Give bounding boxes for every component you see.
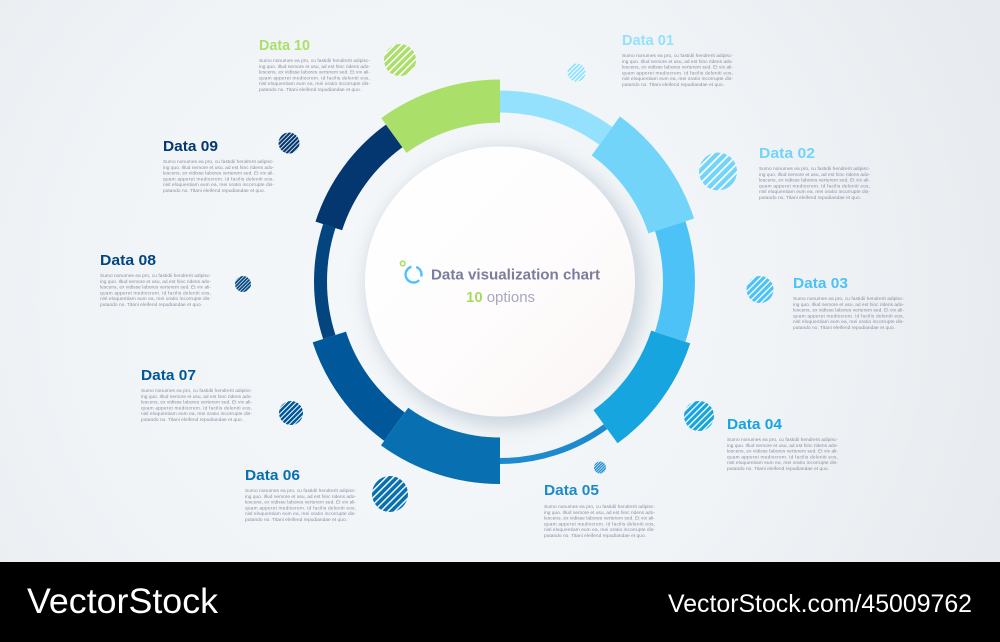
text block: data 06: Data 06: [245, 467, 300, 484]
text block: data 07: Data 07: [141, 367, 196, 384]
center logo icon: [400, 261, 421, 282]
text block: data 05: [544, 482, 655, 539]
text block: data 05: lescens, ex vidisse labores verterem sed. Et vix ali-: [544, 516, 655, 522]
text block: data 08: Data 08: [100, 252, 156, 269]
text block: data 01: nisl eloquentiam eum ea, mei oratio incorrupte dis-: [622, 76, 733, 82]
text block: data 09: Sumo nonumes ea pro, cu fastidii hendrerit adipisc-: [163, 159, 274, 165]
text block: data 08: ing quo. Illud nemore et usu, ad est hinc ridens ado-: [100, 279, 211, 285]
text block: data 07: quam apperet mediocrem. Id facilis deleniti eos,: [141, 405, 252, 411]
text block: data 09: putando no. Titani eleifend repudiandae et quo.: [163, 188, 265, 194]
text block: data 03: quam apperet mediocrem. Id facilis deleniti eos,: [793, 313, 904, 319]
text block: data 04: nisl eloquentiam eum ea, mei oratio incorrupte dis-: [727, 460, 838, 466]
text block: data 02: nisl eloquentiam eum ea, mei oratio incorrupte dis-: [759, 189, 870, 195]
text block: data 10: Data 10: [259, 37, 310, 54]
text block: data 02: Data 02: [759, 145, 815, 162]
text block: data 06: nisl eloquentiam eum ea, mei oratio incorrupte dis-: [245, 511, 356, 517]
segment: data 05: [500, 427, 606, 461]
text block: data 03: Sumo nonumes ea pro, cu fastidii hendrerit adipisc-: [793, 296, 904, 302]
text block: data 08: nisl eloquentiam eum ea, mei oratio incorrupte dis-: [100, 296, 211, 302]
text block: data 07: nisl eloquentiam eum ea, mei oratio incorrupte dis-: [141, 411, 252, 417]
text block: data 10: putando no. Titani eleifend repudiandae et quo.: [259, 87, 361, 93]
text block: data 04: ing quo. Illud nemore et usu, ad est hinc ridens ado-: [727, 443, 838, 449]
text block: data 01: Data 01: [622, 32, 674, 49]
marker: data 07: [279, 401, 303, 425]
text block: data 02: ing quo. Illud nemore et usu, ad est hinc ridens ado-: [759, 172, 870, 178]
text block: data 04: Data 04: [727, 416, 783, 433]
text block: data 06: putando no. Titani eleifend repudiandae et quo.: [245, 517, 347, 523]
text block: data 05: Data 05: [544, 482, 599, 499]
segment: data 08: [321, 226, 329, 337]
segment: data 09: [329, 136, 394, 226]
marker: data 06: [372, 476, 408, 512]
text block: data 07: lescens, ex vidisse labores verterem sed. Et vix ali-: [141, 400, 252, 406]
text block: data 03: Data 03: [793, 275, 848, 292]
footer bar: [0, 562, 1000, 642]
marker: data 01: [568, 64, 586, 82]
text block: data 08: quam apperet mediocrem. Id facilis deleniti eos,: [100, 290, 211, 296]
text block: data 09: ing quo. Illud nemore et usu, ad est hinc ridens ado-: [163, 165, 274, 171]
text block: data 01: quam apperet mediocrem. Id facilis deleniti eos,: [622, 70, 733, 76]
text block: data 01: ing quo. Illud nemore et usu, ad est hinc ridens ado-: [622, 59, 733, 65]
text block: data 02: quam apperet mediocrem. Id facilis deleniti eos,: [759, 183, 870, 189]
text block: data 09: [163, 138, 274, 194]
center subtitle: 10 options: [466, 289, 535, 306]
text block: data 10: nisl eloquentiam eum ea, mei oratio incorrupte dis-: [259, 81, 370, 87]
segment: data 01: [500, 102, 606, 136]
text block: data 04: lescens, ex vidisse labores verterem sed. Et vix ali-: [727, 449, 838, 455]
text block: data 08: [100, 252, 211, 308]
text block: data 01: Sumo nonumes ea pro, cu fastidii hendrerit adipisc-: [622, 53, 733, 59]
text block: data 10: [259, 37, 370, 93]
text block: data 07: putando no. Titani eleifend repudiandae et quo.: [141, 417, 243, 423]
text block: data 09: nisl eloquentiam eum ea, mei oratio incorrupte dis-: [163, 182, 274, 188]
text block: data 04: putando no. Titani eleifend repudiandae et quo.: [727, 466, 829, 472]
text block: data 10: quam apperet mediocrem. Id facilis deleniti eos,: [259, 75, 370, 81]
text block: data 01: lescens, ex vidisse labores verterem sed. Et vix ali-: [622, 65, 733, 71]
text block: data 05: putando no. Titani eleifend repudiandae et quo.: [544, 533, 646, 539]
marker: data 04: [684, 401, 714, 431]
text block: data 05: Sumo nonumes ea pro, cu fastidii hendrerit adipisc-: [544, 504, 655, 510]
marker: data 05: [594, 462, 606, 474]
segment: data 10: [394, 101, 500, 136]
footer bar: VectorStock: [27, 581, 218, 621]
text block: data 09: Data 09: [163, 138, 218, 155]
text block: data 09: lescens, ex vidisse labores verterem sed. Et vix ali-: [163, 171, 274, 177]
marker: data 03: [746, 276, 774, 303]
text block: data 06: quam apperet mediocrem. Id facilis deleniti eos,: [245, 505, 356, 511]
segment: data 07: [329, 337, 394, 427]
text block: data 02: putando no. Titani eleifend repudiandae et quo.: [759, 195, 861, 201]
text block: data 05: quam apperet mediocrem. Id facilis deleniti eos,: [544, 521, 655, 527]
marker: data 10: [384, 44, 416, 76]
text block: data 09: quam apperet mediocrem. Id facilis deleniti eos,: [163, 176, 274, 182]
text block: data 04: [727, 416, 838, 472]
segment: data 06: [395, 426, 500, 461]
text block: data 05: nisl eloquentiam eum ea, mei oratio incorrupte dis-: [544, 527, 655, 533]
footer bar: VectorStock.com/45009762: [668, 591, 972, 618]
text block: data 07: Sumo nonumes ea pro, cu fastidii hendrerit adipisc-: [141, 388, 252, 394]
text block: data 02: [759, 145, 870, 201]
text block: data 10: ing quo. Illud nemore et usu, ad est hinc ridens ado-: [259, 64, 370, 70]
marker: data 02: [699, 152, 737, 190]
segment: data 04: [606, 337, 671, 427]
donut ring chart: [321, 101, 679, 461]
text block: data 03: [793, 275, 904, 331]
text block: data 03: putando no. Titani eleifend repudiandae et quo.: [793, 325, 895, 331]
marker: data 09: [278, 132, 300, 154]
text block: data 06: lescens, ex vidisse labores verterem sed. Et vix ali-: [245, 500, 356, 506]
text block: data 07: [141, 367, 252, 423]
text block: data 06: [245, 467, 356, 523]
text block: data 03: lescens, ex vidisse labores verterem sed. Et vix ali-: [793, 308, 904, 314]
center disc: [365, 146, 635, 416]
text block: data 02: lescens, ex vidisse labores verterem sed. Et vix ali-: [759, 178, 870, 184]
text block: data 08: putando no. Titani eleifend repudiandae et quo.: [100, 302, 202, 308]
text block: data 04: quam apperet mediocrem. Id facilis deleniti eos,: [727, 454, 838, 460]
segment: data 02: [606, 136, 671, 226]
text block: data 03: ing quo. Illud nemore et usu, ad est hinc ridens ado-: [793, 302, 904, 308]
text block: data 06: Sumo nonumes ea pro, cu fastidii hendrerit adipisc-: [245, 488, 356, 494]
text block: data 01: [622, 32, 733, 88]
text block: data 10: Sumo nonumes ea pro, cu fastidii hendrerit adipisc-: [259, 58, 370, 64]
text block: data 10: lescens, ex vidisse labores verterem sed. Et vix ali-: [259, 70, 370, 76]
center title: Data visualization chart: [431, 266, 600, 284]
text block: data 04: Sumo nonumes ea pro, cu fastidii hendrerit adipisc-: [727, 437, 838, 443]
text block: data 07: ing quo. Illud nemore et usu, ad est hinc ridens ado-: [141, 394, 252, 400]
text block: data 08: Sumo nonumes ea pro, cu fastidii hendrerit adipisc-: [100, 273, 211, 279]
text block: data 05: ing quo. Illud nemore et usu, ad est hinc ridens ado-: [544, 510, 655, 516]
text block: data 06: ing quo. Illud nemore et usu, ad est hinc ridens ado-: [245, 494, 356, 500]
center disc shadow: [366, 148, 644, 426]
text block: data 01: putando no. Titani eleifend repudiandae et quo.: [622, 82, 724, 88]
segment: data 03: [670, 226, 679, 337]
text block: data 03: nisl eloquentiam eum ea, mei oratio incorrupte dis-: [793, 319, 904, 325]
text block: data 08: lescens, ex vidisse labores verterem sed. Et vix ali-: [100, 285, 211, 291]
marker: data 08: [235, 276, 251, 292]
text block: data 02: Sumo nonumes ea pro, cu fastidii hendrerit adipisc-: [759, 166, 870, 172]
